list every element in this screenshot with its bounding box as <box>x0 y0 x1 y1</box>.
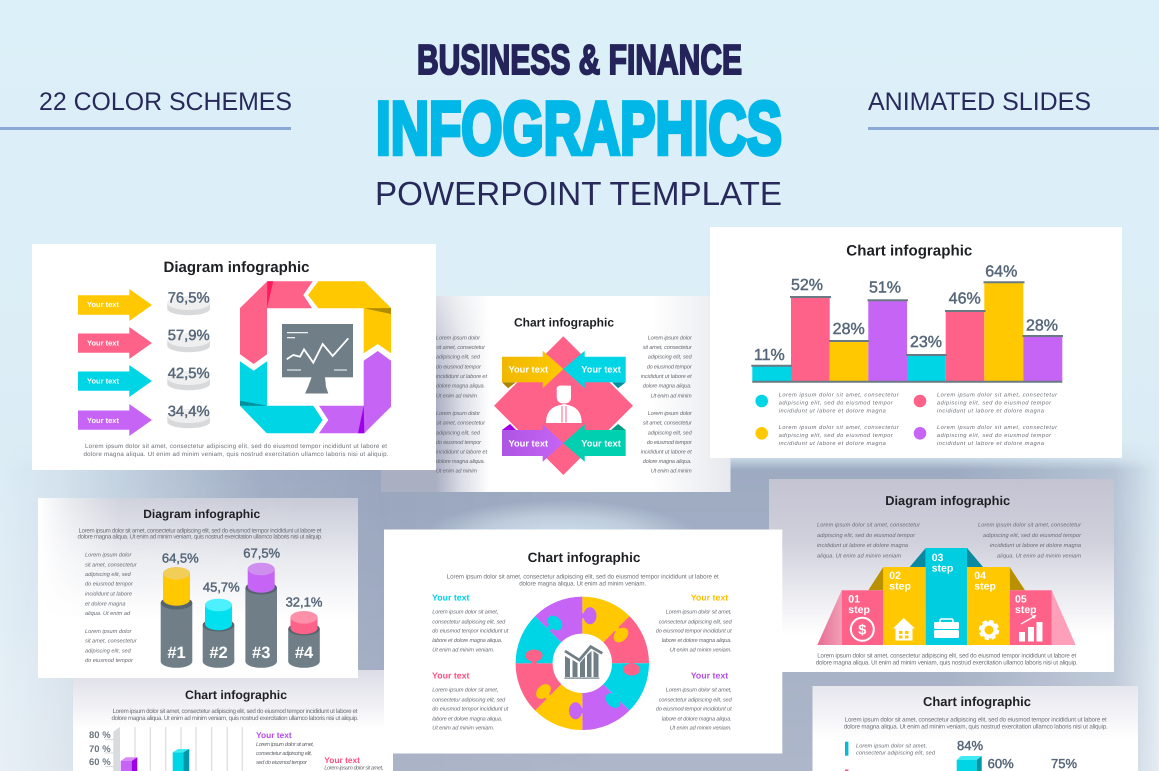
callout: top right: do eiusmod tempor incididunt ut <box>656 627 732 634</box>
step labels: 01 <box>848 593 860 605</box>
callout: top right: consectetur adipiscing elit, sed <box>659 618 733 625</box>
ring: cyan segment <box>240 361 323 433</box>
intro text: Lorem ipsum dolor sit amet, consectetur adipiscing elit, sed do eiusmod tempor incididunt ut labore et <box>845 716 1107 724</box>
legend: cyan: adipiscing elit, sed do eiusmod tempor <box>779 400 894 406</box>
legend: pink: incididunt ut labore et dolore magna <box>937 408 1044 414</box>
cylinder #1: #1 <box>167 644 186 662</box>
callout: bottom right: do eiusmod tempor incididunt ut <box>656 706 732 713</box>
panel: puzzle ring chart <box>384 530 782 754</box>
right text: incididunt ut labore et dolore magna <box>990 542 1081 549</box>
panel: bottom-left bar chart <box>73 670 393 771</box>
side text: sit amet, consectetur <box>85 638 138 645</box>
callout: top right <box>656 592 733 654</box>
intro text: dolore magna aliqua. Ut enim ad minim veniam. <box>519 581 646 588</box>
left text <box>817 522 921 560</box>
side text: aliqua. Ut enim ad <box>85 610 131 617</box>
panel: bar chart with legend <box>710 227 1122 458</box>
left text: aliqua. Ut enim ad minim veniam <box>817 552 901 560</box>
icon: businessman <box>546 386 582 423</box>
cylinder #2: #2 <box>209 644 228 662</box>
left text <box>436 334 487 475</box>
bar: 84%: 84% <box>957 738 983 753</box>
bars <box>751 282 1063 382</box>
callout: pink <box>324 755 383 771</box>
heading: Chart infographic <box>185 688 287 702</box>
body text: dolore magna aliqua. Ut enim ad minim veniam, quis nostrud exercitation ullamco laboris nisi ut aliquip. <box>84 451 389 458</box>
callout: top right: Your text <box>691 592 728 602</box>
disc: 57,9% <box>167 328 210 352</box>
arrow row 4 <box>78 404 152 436</box>
callout: bottom right: Lorem ipsum dolor sit amet, <box>666 687 732 694</box>
title block: POWERPOINT TEMPLATE <box>375 176 782 213</box>
icon: house <box>893 618 915 640</box>
cylinder #4 <box>286 595 323 668</box>
cylinder #2: 45,7% <box>203 580 240 595</box>
callout: pink: Your text <box>324 755 360 765</box>
axis labels <box>89 730 111 768</box>
callout: bottom left: labore et dolore magna aliqua. <box>432 715 502 722</box>
intro text <box>447 573 719 588</box>
left text: adipiscing elit, sed <box>436 429 481 436</box>
left text: do eiusmod tempor <box>436 363 482 370</box>
heading: Diagram infographic <box>143 507 261 521</box>
callout: top right: labore et dolore magna aliqua. <box>662 637 732 644</box>
intro text: dolore magna aliqua. Ut enim ad minim veniam, quis nostrud exercitation ullamco laboris nisi ut aliquip. <box>78 534 323 540</box>
side text: Lorem ipsum dolor <box>85 552 132 559</box>
value labels: 64% <box>985 263 1017 280</box>
arrow row 1: Your text <box>87 300 119 309</box>
callout: bottom left: Your text <box>432 670 470 680</box>
cylinder #1 <box>161 551 199 668</box>
legend item <box>845 742 936 771</box>
callout: bottom right: labore et dolore magna aliqua. <box>662 715 732 722</box>
legend: pink <box>914 392 1058 414</box>
right text: incididunt ut labore et <box>641 373 692 380</box>
arrow row 3: Your text <box>87 376 119 386</box>
arrow: cyan <box>563 351 626 388</box>
value 75%: 75% <box>1051 756 1077 771</box>
left text: Lorem ipsum dolor sit amet, consectetur <box>817 522 921 528</box>
title block: BUSINESS & FINANCE <box>417 36 742 83</box>
icon: presentation screen <box>282 324 353 394</box>
icon: growth chart <box>1019 615 1042 642</box>
callout: top left: Your text <box>432 592 470 602</box>
step labels: step <box>932 562 953 574</box>
cylinder #4: 32,1% <box>286 595 323 610</box>
arrow: yellow: Your text <box>508 364 548 374</box>
callout: bottom right <box>656 670 733 732</box>
body text <box>84 443 389 458</box>
callout: top left: labore et dolore magna aliqua. <box>432 637 502 644</box>
legend: purple <box>914 424 1058 447</box>
steps staircase <box>817 548 1076 645</box>
callout: bottom right: consectetur adipiscing elit, sed <box>659 696 733 703</box>
legend: pink: adipiscing elit, sed do eiusmod tempor <box>937 400 1052 406</box>
title block: INFOGRAPHICS <box>376 86 782 170</box>
right text: sit amet, consectetur <box>643 420 693 427</box>
value labels: 23% <box>910 334 942 351</box>
left text: sit amet, consectetur <box>436 344 486 351</box>
step labels: step <box>1015 604 1037 616</box>
arrow row 1 <box>78 289 152 321</box>
intro text: Lorem ipsum dolor sit amet, consectetur adipiscing elit, sed do eiusmod tempor incididunt ut labore et <box>112 708 358 715</box>
right text: adipiscing elit, sed <box>648 354 693 361</box>
panel: step diagram <box>769 479 1114 672</box>
right text <box>978 522 1082 560</box>
callout: bottom left: Lorem ipsum dolor sit amet, <box>432 687 498 694</box>
title block <box>375 36 782 213</box>
arrow: purple: Your text <box>508 439 548 449</box>
arrow row 3 <box>78 365 152 397</box>
legend: cyan <box>755 392 900 414</box>
side text: adipiscing elit, sed <box>85 647 132 654</box>
step labels: 05 <box>1015 593 1027 605</box>
cylinder #3 <box>243 546 281 668</box>
side text <box>85 552 138 664</box>
intro text: Lorem ipsum dolor sit amet, consectetur adipiscing elit, sed do eiusmod tempor incididunt ut labore et <box>447 573 719 580</box>
legend: purple: Lorem ipsum dolor sit amet, consectetur <box>937 424 1058 431</box>
right text: incididunt ut labore et <box>641 449 692 456</box>
left text: sit amet, consectetur <box>436 420 486 427</box>
step labels: 03 <box>932 552 944 564</box>
right text: Lorem ipsum dolor <box>648 410 693 417</box>
puzzle ring <box>516 597 649 730</box>
right text: dolore magna aliqua. <box>643 383 692 390</box>
heading: Chart infographic <box>514 316 614 330</box>
value labels: 11% <box>754 347 785 364</box>
icon: gear <box>980 621 998 639</box>
cylinder #2 <box>203 580 240 668</box>
bottom text: Lorem ipsum dolor sit amet, consectetur adipiscing elit, sed do eiusmod tempor incididunt ut labore et <box>817 652 1076 659</box>
callout: bottom right: Ut enim ad minim veniam. <box>670 725 732 732</box>
legend: yellow: incididunt ut labore et dolore magna <box>779 440 886 447</box>
intro text: Lorem ipsum dolor sit amet, consectetur adipiscing elit, sed do eiusmod tempor incididunt ut labore et <box>78 528 322 534</box>
right text: adipiscing elit, sed <box>648 429 693 436</box>
disc: 34,4% <box>167 404 210 428</box>
legend: yellow: adipiscing elit, sed do eiusmod tempor <box>779 432 894 439</box>
legend: purple: adipiscing elit, sed do eiusmod tempor <box>937 432 1052 439</box>
step labels: step <box>974 580 996 592</box>
disc: 34,4%: 34,4% <box>168 404 210 420</box>
left text: Ut enim ad minim <box>436 468 477 475</box>
ring: yellow segment <box>308 281 391 353</box>
header: left label: 22 COLOR SCHEMES <box>39 88 292 116</box>
legend: yellow: Lorem ipsum dolor sit amet, consectetur <box>779 424 900 431</box>
value labels <box>754 263 1058 364</box>
disc: 42,5% <box>167 366 210 390</box>
cylinder #1: 64,5% <box>162 551 199 566</box>
callout: top right: Ut enim ad minim veniam. <box>670 647 732 654</box>
left text: dolore magna aliqua. <box>436 383 485 390</box>
axis labels: 80 % <box>89 730 111 741</box>
intro text <box>78 528 323 540</box>
side text: adipiscing elit, sed <box>85 571 132 578</box>
disc: 57,9%: 57,9% <box>168 328 210 344</box>
disc: 76,5%: 76,5% <box>168 290 210 306</box>
right text: do eiusmod tempor <box>647 363 693 370</box>
header: right label <box>868 88 1159 130</box>
cylinder #3: #3 <box>252 644 270 662</box>
left text: Lorem ipsum dolor <box>436 410 481 417</box>
side text: et dolore magna <box>85 600 125 607</box>
legend: purple: incididunt ut labore et dolore magna <box>937 440 1044 447</box>
pink diamond <box>494 336 633 475</box>
callout: top left: Ut enim ad minim veniam. <box>432 647 494 654</box>
legend: pink: Lorem ipsum dolor sit amet, consectetur <box>937 392 1058 398</box>
value labels: 28% <box>833 321 865 338</box>
intro text <box>112 708 359 722</box>
arrow row 2: Your text <box>87 338 119 348</box>
heading: Chart infographic <box>923 694 1031 709</box>
heading: Diagram infographic <box>164 259 310 276</box>
right text: Ut enim ad minim <box>651 392 692 399</box>
step labels: step <box>848 604 870 616</box>
icon: bar chart trend <box>564 647 602 679</box>
callout: purple: consectetur adipiscing elit, <box>256 750 312 757</box>
arrow: green <box>563 424 626 462</box>
value labels: 28% <box>1026 317 1058 334</box>
left text: adipiscing elit, sed do eiusmod tempor <box>817 532 916 539</box>
grid <box>105 727 242 771</box>
legend item: Lorem ipsum dolor sit amet, <box>856 742 927 750</box>
legend: cyan: incididunt ut labore et dolore magna <box>779 408 886 414</box>
callout: top left: consectetur adipiscing elit, sed <box>432 618 506 625</box>
side text: Lorem ipsum dolor <box>85 628 132 635</box>
left text: Lorem ipsum dolor <box>436 334 481 341</box>
side text: incididunt ut labore <box>85 590 132 597</box>
value labels: 52% <box>791 277 823 294</box>
callout: bottom left: consectetur adipiscing elit, sed <box>432 696 506 703</box>
body text: Lorem ipsum dolor sit amet, consectetur adipiscing elit, sed do eiusmod tempor incididunt ut labore et <box>85 443 387 450</box>
right text: aliqua. Ut enim ad minim veniam <box>997 552 1081 560</box>
intro text: dolore magna aliqua. Ut enim ad minim veniam, quis nostrud exercitation ullamco laboris nisi ut aliquip. <box>844 724 1108 730</box>
step labels <box>848 552 1037 616</box>
callout: purple: Your text <box>256 730 292 740</box>
right text: Ut enim ad minim <box>651 468 692 475</box>
arrow: cyan: Your text <box>581 364 621 374</box>
callout: top right: Lorem ipsum dolor sit amet, <box>666 609 732 616</box>
right text: adipiscing elit, sed do eiusmod tempor <box>983 532 1082 539</box>
arrow: green: Your text <box>581 439 621 449</box>
panel: diagram with arrows and ring <box>32 244 436 470</box>
intro text: dolore magna aliqua. Ut enim ad minim veniam, quis nostrud exercitation ullamco laboris nisi ut aliquip. <box>112 715 359 722</box>
side text: do eiusmod tempor <box>85 581 134 588</box>
left text: incididunt ut labore et <box>436 373 487 380</box>
bar: 84% <box>957 738 983 771</box>
header: left label <box>0 88 292 130</box>
callout: bottom left: Ut enim ad minim veniam. <box>432 725 494 732</box>
cylinder #3: 67,5% <box>243 546 281 561</box>
arrow: yellow <box>502 351 563 388</box>
heading: Diagram infographic <box>885 493 1010 508</box>
bar: cyan <box>173 749 189 771</box>
arrow row 2 <box>78 327 152 359</box>
step labels: 02 <box>889 570 901 582</box>
right text: dolore magna aliqua. <box>643 458 692 465</box>
axis labels: 60 % <box>89 757 111 768</box>
callout: top left: do eiusmod tempor incididunt ut <box>432 627 509 634</box>
right text: do eiusmod tempor <box>647 439 693 446</box>
panel: bottom-right bar chart <box>812 686 1138 771</box>
bar: purple <box>121 757 137 771</box>
value labels: 46% <box>949 291 981 308</box>
callout: bottom right: Your text <box>691 670 728 680</box>
legend item: consectetur adipiscing elit, sed <box>856 750 936 756</box>
right text: Lorem ipsum dolor sit amet, consectetur <box>978 522 1082 528</box>
panel: diamond chart <box>381 296 730 492</box>
left text: Ut enim ad minim <box>436 392 477 399</box>
value 60%: 60% <box>988 756 1014 771</box>
bottom text: dolore magna aliqua. Ut enim ad minim veniam, quis nostrud exercitation ullamco laboris nisi ut aliquip. <box>816 659 1078 666</box>
right text: sit amet, consectetur <box>643 344 693 351</box>
disc: 42,5%: 42,5% <box>168 366 210 382</box>
arrow row 4: Your text <box>87 416 119 425</box>
left text: do eiusmod tempor <box>436 439 482 446</box>
icon: dollar <box>851 618 874 641</box>
cylinder #4: #4 <box>295 644 314 662</box>
bottom text <box>816 652 1078 666</box>
callout: purple: sed do eiusmod tempor <box>256 759 308 766</box>
icon: dollar: $ <box>858 622 866 638</box>
step labels: 04 <box>974 570 986 582</box>
right text: Lorem ipsum dolor <box>648 334 693 341</box>
left text: incididunt ut labore et dolore magna <box>817 542 908 549</box>
ring: purple segment <box>319 351 391 433</box>
side text: do eiusmod tempor <box>85 657 134 664</box>
axis labels: 70 % <box>89 744 111 755</box>
left text: incididunt ut labore et <box>436 449 487 456</box>
callout: purple: Lorem ipsum dolor sit amet, <box>256 741 314 748</box>
intro text <box>844 716 1108 730</box>
panel: cylinder diagram <box>38 498 358 678</box>
side text: sit amet, consectetur <box>85 561 138 568</box>
left text: dolore magna aliqua. <box>436 458 485 465</box>
arrow: purple <box>502 424 563 462</box>
callout: top left: Lorem ipsum dolor sit amet, <box>432 609 498 616</box>
icon: briefcase <box>934 619 959 638</box>
callout: top left <box>432 592 509 654</box>
value labels: 51% <box>869 280 901 297</box>
right text <box>641 334 693 475</box>
left text: adipiscing elit, sed <box>436 354 481 361</box>
heading: Chart infographic <box>846 242 972 260</box>
step labels: step <box>889 580 911 592</box>
heading: Chart infographic <box>528 550 641 565</box>
callout: bottom left <box>432 670 509 732</box>
header: right label: ANIMATED SLIDES <box>868 88 1091 116</box>
callout: purple <box>256 730 314 766</box>
ring: pink segment <box>240 281 313 364</box>
disc: 76,5% <box>167 290 210 315</box>
callout: bottom left: do eiusmod tempor incididunt ut <box>432 706 509 713</box>
legend: cyan: Lorem ipsum dolor sit amet, consectetur <box>779 392 900 398</box>
legend: yellow <box>755 424 900 447</box>
